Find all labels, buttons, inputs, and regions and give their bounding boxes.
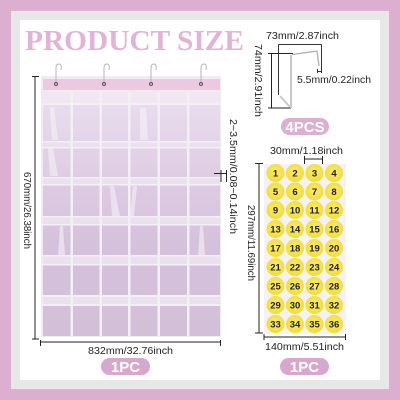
sticker numbers: 17	[270, 244, 281, 254]
sticker numbers: 7	[312, 187, 317, 198]
sticker numbers: 12	[329, 206, 339, 216]
sticker numbers: 3	[312, 168, 317, 180]
sticker numbers: 26	[290, 282, 300, 292]
label: organizer quantity: 1PC	[111, 359, 140, 376]
dimension: hook width: 73mm/2.87inch	[266, 30, 339, 42]
sticker numbers: 1	[273, 168, 279, 180]
dimension: sheet height: 297mm/11.69inch	[245, 205, 257, 281]
dimension: sheet height	[245, 164, 263, 333]
dimension: pocket gap: 2~3.5mm/0.08~0.14inch	[227, 119, 239, 234]
sticker numbers: 28	[329, 282, 339, 292]
sticker numbers: 23	[309, 262, 320, 274]
sticker numbers: 29	[270, 300, 281, 312]
dimension: sticker diameter: 30mm/1.18inch	[270, 145, 343, 157]
pocket flap bands	[43, 142, 220, 304]
sticker numbers: 11	[309, 206, 320, 216]
sticker numbers: 34	[290, 320, 301, 330]
sticker numbers: 31	[309, 300, 320, 312]
dimension: sheet width	[264, 334, 346, 353]
label: hook quantity: 4PCS	[285, 119, 325, 136]
sticker numbers: 18	[290, 244, 300, 254]
sticker numbers: 15	[309, 224, 320, 236]
sticker numbers: 10	[290, 206, 300, 216]
dimension: organizer width: 832mm/32.76inch	[88, 345, 173, 357]
sticker numbers: 9	[273, 206, 278, 216]
dimension: organizer width	[40, 340, 220, 357]
sticker numbers: 21	[270, 262, 281, 274]
dimension: hook height	[252, 44, 293, 117]
sticker numbers: 6	[292, 187, 298, 198]
pocket highlights	[48, 108, 205, 255]
hanging organizer	[41, 64, 221, 337]
label: sheet quantity: 1PC	[290, 359, 319, 376]
upper pale strip	[43, 92, 220, 103]
label: sheet quantity	[280, 358, 329, 376]
sticker numbers: 2	[292, 168, 298, 180]
sticker numbers: 14	[290, 224, 301, 236]
sticker numbers: 20	[329, 244, 339, 254]
sticker numbers: 30	[290, 300, 300, 312]
sticker numbers: 4	[331, 168, 337, 180]
sticker numbers	[270, 168, 340, 330]
sticker numbers: 19	[309, 244, 320, 254]
title: PRODUCT SIZE	[25, 25, 244, 57]
dimension: pocket gap	[214, 119, 239, 234]
label: organizer quantity	[101, 358, 150, 376]
dimension: hook tip: 5.5mm/0.22inch	[297, 74, 371, 86]
hooks and grommets	[54, 64, 206, 86]
sticker sheet	[264, 164, 346, 334]
sticker numbers: 16	[329, 224, 339, 236]
sticker numbers: 27	[309, 282, 320, 292]
sticker numbers: 33	[270, 320, 281, 330]
dimension: hook width	[266, 30, 339, 95]
dimension: sticker diameter	[270, 145, 343, 172]
sticker numbers: 13	[270, 224, 281, 236]
sticker numbers: 35	[309, 320, 320, 330]
sticker numbers: 32	[329, 300, 339, 312]
sticker numbers: 36	[329, 320, 339, 330]
sticker numbers: 8	[331, 187, 337, 198]
sticker numbers: 25	[270, 282, 281, 292]
pocket seams	[41, 92, 221, 336]
dimension: sheet width: 140mm/5.51inch	[265, 341, 344, 353]
sticker numbers: 22	[290, 262, 300, 274]
dimension: hook height: 74mm/2.91inch	[252, 44, 264, 117]
hook illustration	[280, 51, 319, 108]
pink header band	[43, 79, 220, 90]
pocket fabric	[43, 105, 220, 336]
dimension: organizer height: 670mm/26.38inch	[21, 172, 33, 249]
sticker numbers: 24	[329, 262, 340, 274]
sticker numbers: 5	[273, 187, 279, 198]
dimension: organizer height	[21, 76, 39, 339]
